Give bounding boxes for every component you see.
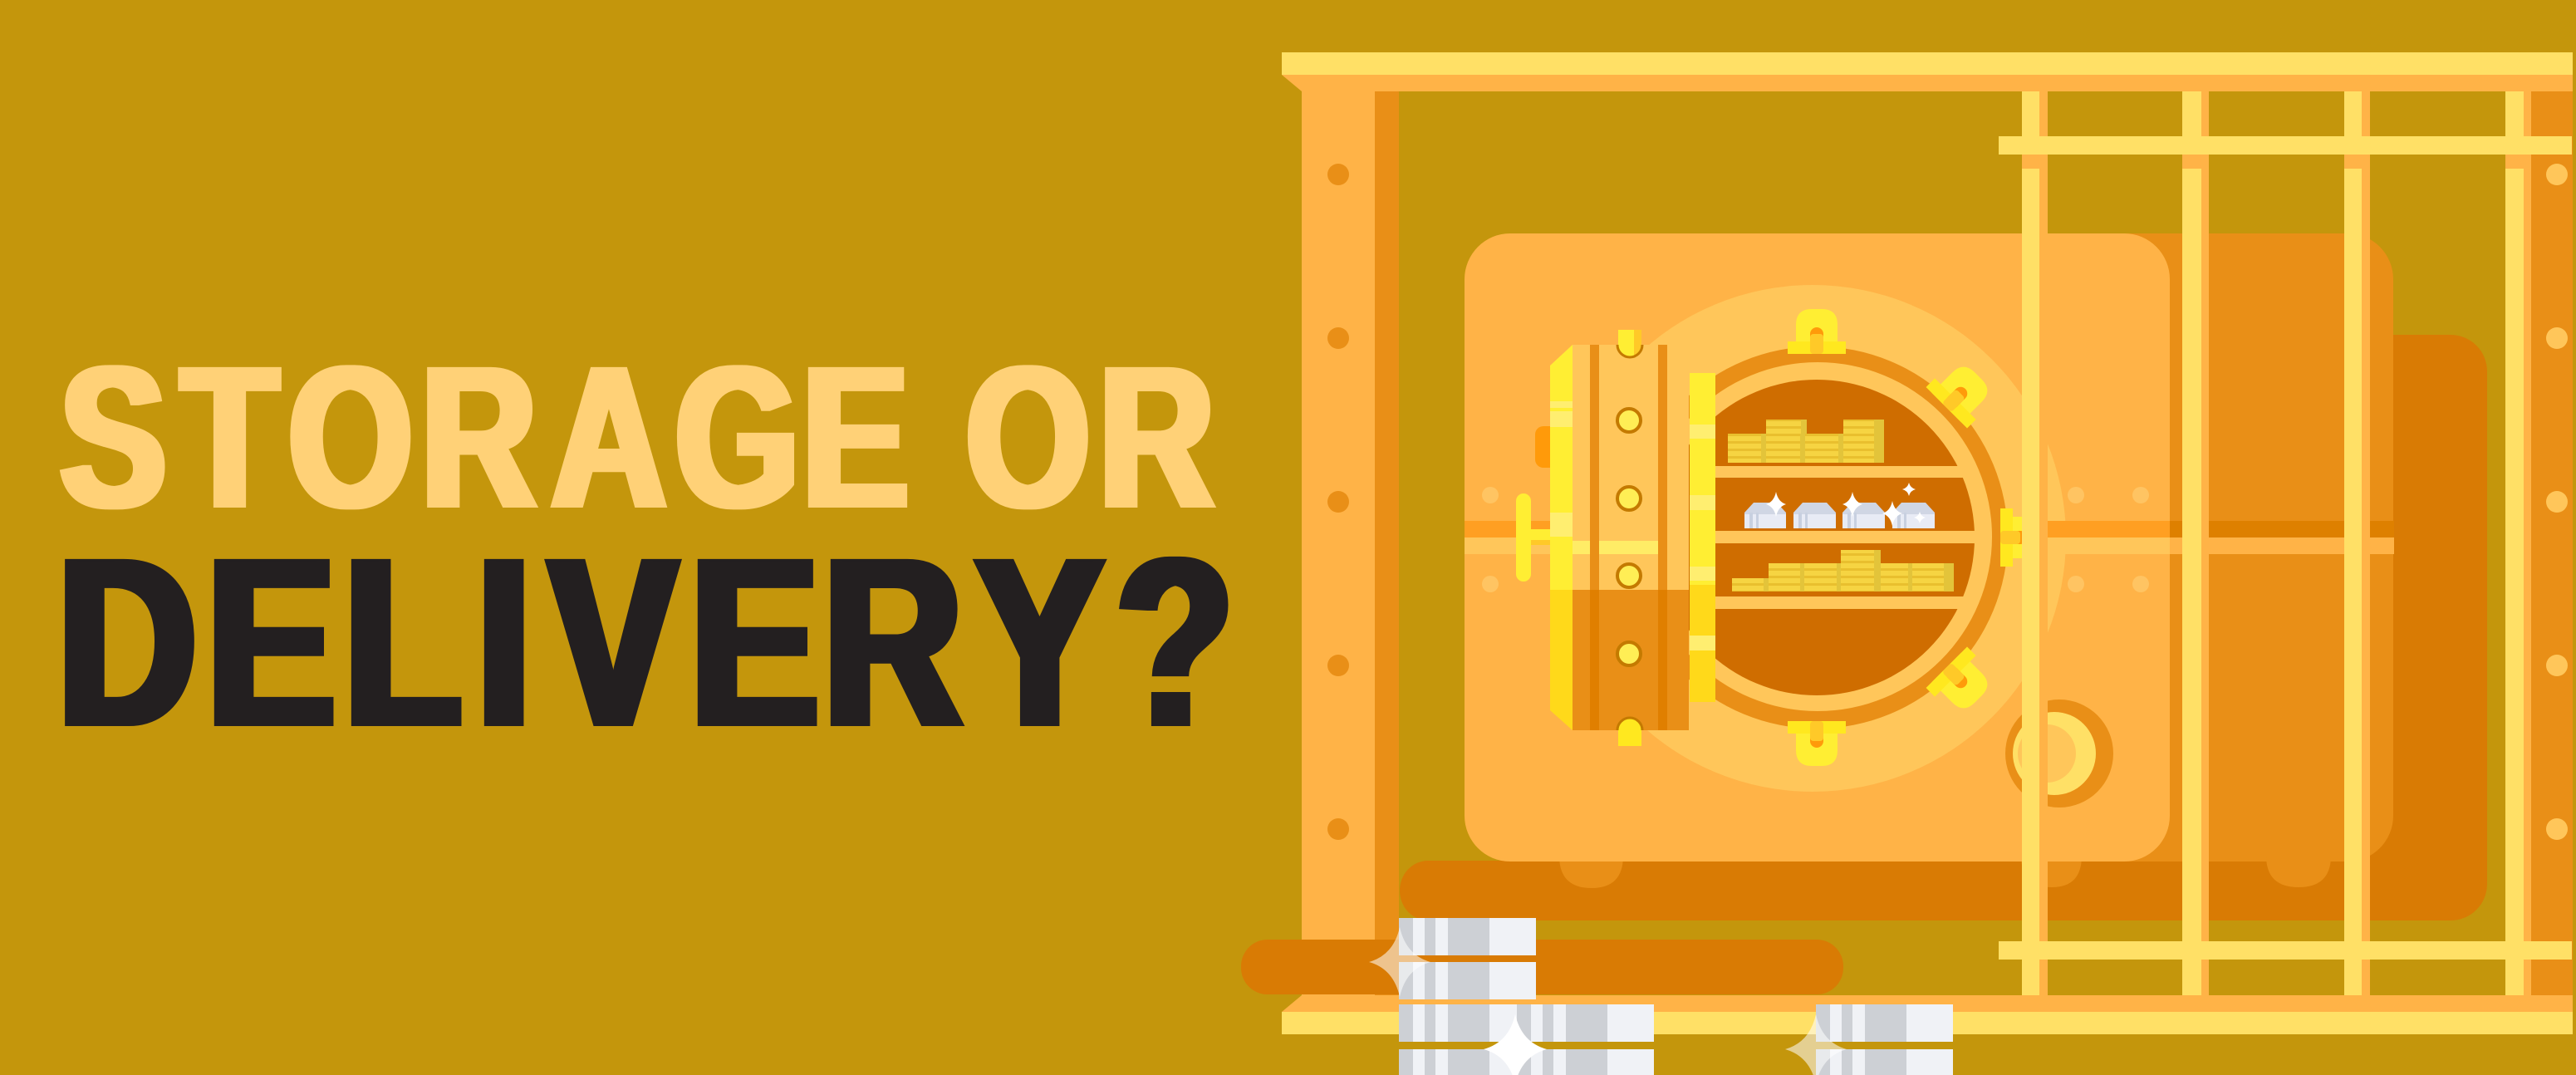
door edge	[1550, 345, 1573, 590]
right clamp	[2000, 508, 2045, 567]
stack right	[1816, 1004, 1953, 1075]
door edge highlights	[1550, 401, 1573, 537]
safe feet	[1559, 856, 2331, 888]
safe side panel	[1911, 233, 2393, 861]
left post rivets	[1327, 164, 1349, 840]
heading line: storage or: STORAGE OR	[60, 325, 1214, 550]
vertical bar shadows	[2022, 91, 2531, 995]
sparkles	[1369, 927, 1847, 1075]
door vertical stripes	[1590, 345, 1667, 730]
door hinge pin top	[1617, 330, 1642, 357]
top beam	[1282, 52, 2573, 91]
door hinge pin bottom	[1617, 718, 1642, 746]
gold bars lower shelf	[1732, 550, 1954, 591]
lower right clamp	[1926, 647, 1999, 719]
bottom clamp	[1788, 721, 1846, 766]
vault frame posts	[1302, 83, 2573, 997]
door highlight band	[1573, 541, 1658, 554]
horizontal bar top	[1999, 136, 2572, 155]
stack left tall	[1399, 918, 1536, 999]
silver bar stacks	[1399, 918, 1953, 1075]
silver bars middle shelf	[1744, 483, 1935, 528]
upper right clamp	[1926, 356, 1999, 428]
cage bars	[1999, 91, 2572, 995]
top clamp	[1788, 309, 1846, 354]
vault halo	[1559, 285, 2066, 792]
gold bars top shelf	[1728, 420, 1884, 463]
safe panel dots	[1482, 487, 2149, 592]
door body lower	[1573, 590, 1689, 730]
door knob	[1535, 426, 1560, 468]
stack bottom row	[1399, 1004, 1654, 1075]
door handle	[1516, 493, 1551, 582]
safe rear shadow	[1400, 335, 2487, 920]
vault shelves	[1711, 466, 1994, 609]
safe front panel	[1465, 233, 2170, 861]
door body upper	[1573, 345, 1689, 590]
clamps around vault opening	[1788, 309, 2045, 766]
heading	[58, 325, 1234, 776]
platform bar	[1241, 940, 1843, 994]
left post	[1302, 83, 1375, 997]
combination dial	[2005, 699, 2113, 807]
vault door frame strip	[1690, 373, 1715, 702]
vault door	[1550, 330, 1689, 746]
horizontal bar bottom	[1999, 941, 2572, 960]
door rivets	[1617, 409, 1641, 665]
sparkles on silver bars	[1766, 483, 1926, 526]
right post	[2531, 83, 2573, 997]
horizontal safe belt	[1465, 521, 2394, 554]
vault ring	[1626, 346, 2008, 729]
right post rivets	[2546, 164, 2568, 840]
heading line: delivery: DELIVERY?	[58, 509, 1234, 776]
bottom beam	[1282, 995, 2573, 1034]
vertical bars	[2022, 91, 2524, 995]
